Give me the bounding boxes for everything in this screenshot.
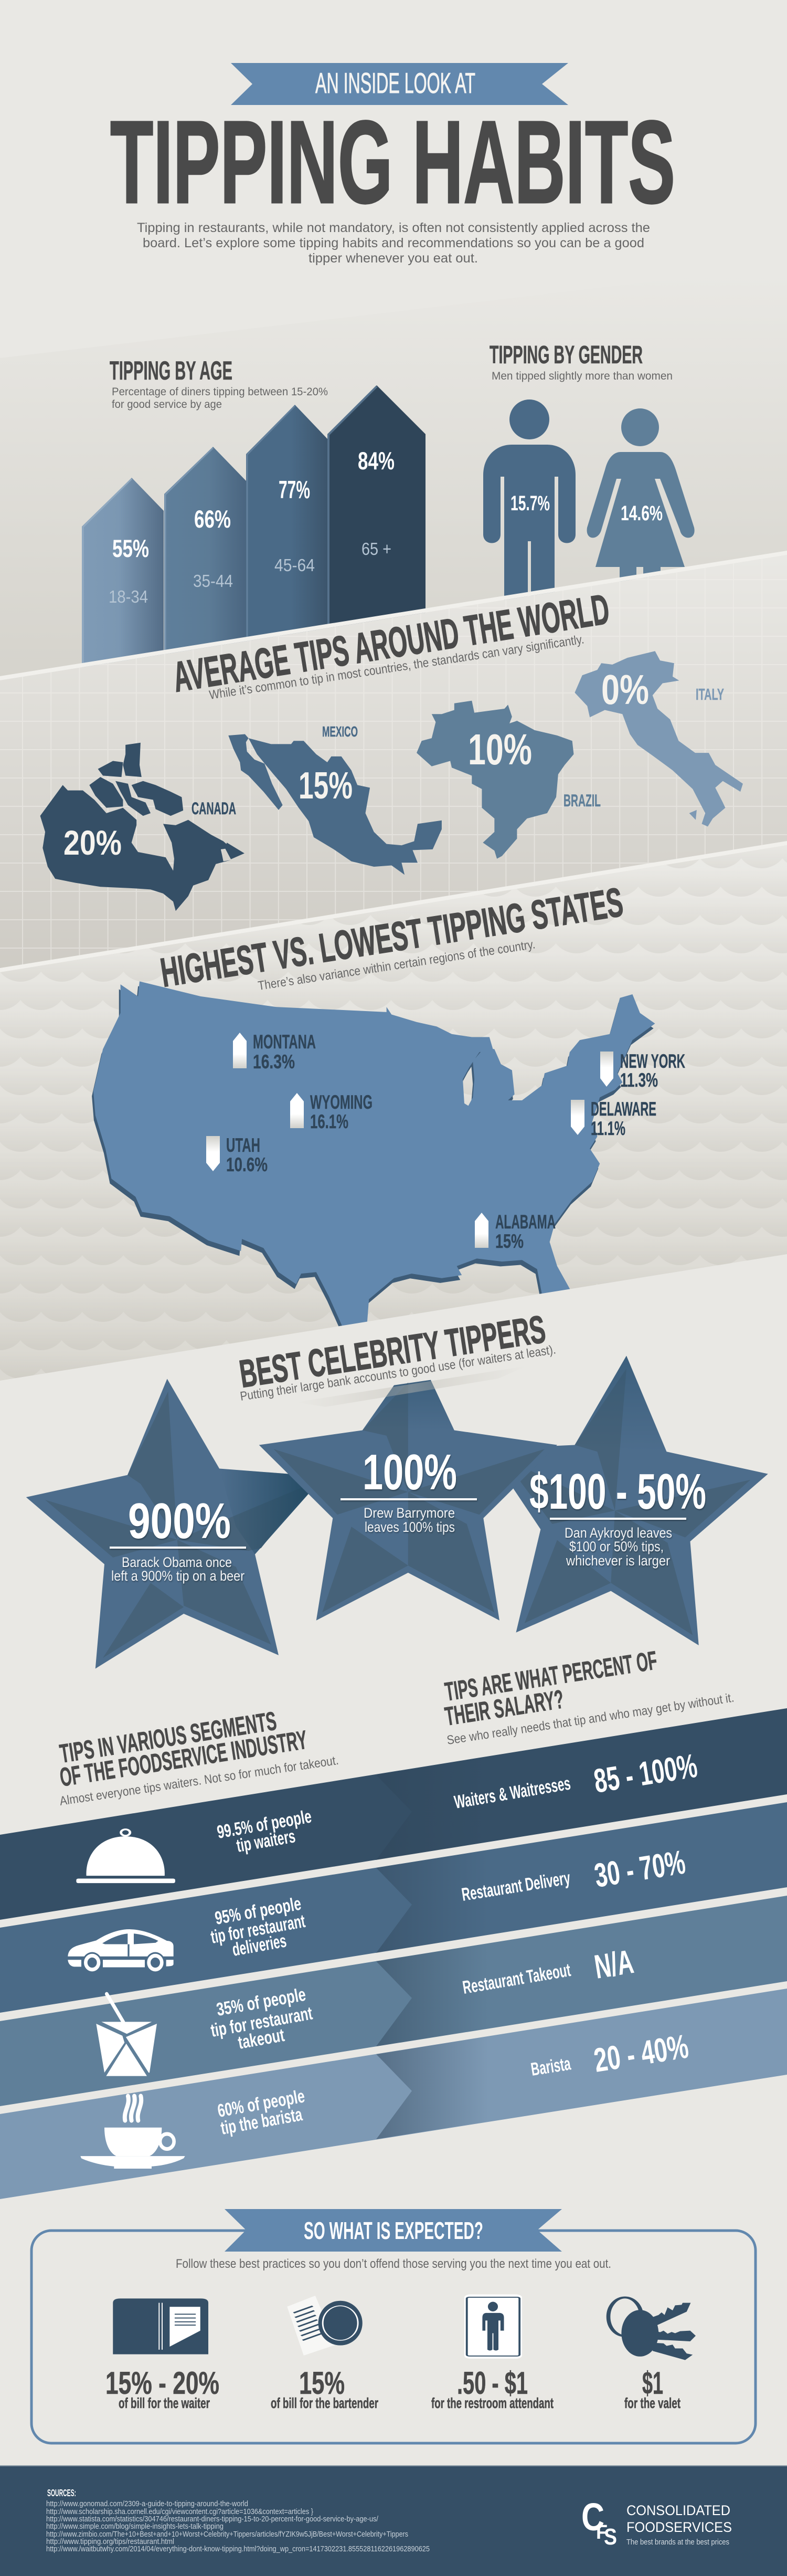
- chart: tipping by age arrows: 66%: [194, 505, 231, 533]
- intro paragraph: [137, 220, 650, 266]
- sources list: http://www.zimbio.com/The+10+Best+and+10+Worst+Celebrity+Tippers/articles/fYZIK9w5JjB/Best+Worst+Celebrity+Tippers: [46, 2530, 408, 2539]
- heading: tips in various segments: [58, 1706, 339, 1809]
- icon: receipt and plate: [287, 2296, 363, 2356]
- map: brazil 10%: [417, 701, 601, 859]
- heading: tipping by age: TIPPING BY AGE: [110, 356, 232, 385]
- icon: coffee cup: [80, 2096, 185, 2169]
- band: waiters: [0, 1708, 787, 1920]
- panel: celebrity tippers background: [0, 1254, 787, 2466]
- panel: average tips around the world: [0, 551, 787, 997]
- icon: man 15.7%: [483, 399, 576, 630]
- band: waiters: tip waiters: [235, 1826, 297, 1856]
- logo: consolidated foodservices: F: [596, 2521, 608, 2543]
- header ribbon: an inside look at: [231, 63, 568, 105]
- map: brazil 10%: BRAZIL: [563, 791, 601, 810]
- map: canada 20%: CANADA: [192, 799, 236, 818]
- map: brazil 10%: 10%: [468, 725, 532, 774]
- band: restaurant delivery: tip for restaurant: [209, 1911, 307, 1948]
- panel: demographics background: [0, 266, 787, 693]
- expected: valet: $1: [642, 2365, 663, 2401]
- state marker: new york 11.3%: NEW YORK: [620, 1050, 685, 1072]
- map: italy 0%: ITALY: [696, 685, 724, 703]
- map: united states: [92, 981, 655, 1340]
- band: restaurant takeout: [0, 1896, 787, 2106]
- logo: consolidated foodservices: FOODSERVICES: [626, 2519, 732, 2535]
- state marker: delaware 11.1%: [571, 1098, 656, 1139]
- expected: valet: for the valet: [624, 2395, 680, 2411]
- map: italy 0%: 0%: [601, 666, 649, 713]
- logo: consolidated foodservices: C: [581, 2495, 604, 2539]
- chart: tipping by age arrows: 55%: [112, 534, 149, 562]
- state marker: montana 16.3%: 16.3%: [253, 1051, 295, 1073]
- band: restaurant takeout: tip for restaurant: [209, 2003, 314, 2041]
- ribbon: so what is expected: [225, 2209, 562, 2252]
- heading: tipping by gender: TIPPING BY GENDER: [490, 341, 643, 369]
- heading: tipping by age: for good service by age: [112, 398, 222, 411]
- ribbon: so what is expected: SO WHAT IS EXPECTED?: [304, 2217, 483, 2244]
- text: best practices: Follow these best practices so you don’t offend those serving you the next time you eat out.: [176, 2257, 611, 2271]
- map: mexico 15%: 15%: [299, 765, 353, 807]
- icon: check presenter: [113, 2298, 208, 2354]
- state marker: montana 16.3%: [233, 1031, 316, 1073]
- heading: tipping by age: [110, 356, 328, 411]
- heading: tips in various segments: Almost everyone tips waiters. Not so for much for takeout.: [59, 1753, 339, 1809]
- heading: tipping by gender: Men tipped slightly more than women: [492, 370, 673, 382]
- icon: restroom sign: [464, 2295, 522, 2359]
- state marker: alabama 15%: ALABAMA: [495, 1211, 556, 1233]
- logo: consolidated foodservices: CONSOLIDATED: [626, 2503, 730, 2518]
- icon: cloche: [76, 1830, 175, 1883]
- band: barista: tip the barista: [219, 2104, 304, 2139]
- icon: man 15.7%: 15.7%: [511, 492, 550, 515]
- panel: so what is expected: [31, 2231, 756, 2443]
- logo: consolidated foodservices: [581, 2495, 732, 2550]
- heading: highest vs lowest tipping states: There’s also variance within certain regions of the country.: [257, 937, 536, 993]
- expected: bartender: 15%: [299, 2365, 345, 2401]
- band: barista: [0, 1989, 787, 2199]
- state marker: wyoming 16.1%: WYOMING: [310, 1091, 373, 1113]
- band: barista: Barista: [529, 2053, 572, 2080]
- state marker: wyoming 16.1%: 16.1%: [310, 1111, 348, 1132]
- state marker: utah 10.6%: UTAH: [226, 1134, 260, 1156]
- star: dan aykroyd $100 - 50%: whichever is larger: [566, 1553, 670, 1569]
- band: waiters: 99.5% of people: [216, 1806, 313, 1843]
- star: drew barrymore 100%: Drew Barrymore: [364, 1505, 455, 1521]
- icon: woman 14.6%: 14.6%: [621, 502, 663, 525]
- intro paragraph: Tipping in restaurants, while not mandatory, is often not consistently applied across the: [137, 220, 650, 235]
- band: restaurant takeout: takeout: [237, 2025, 286, 2053]
- expected: valet: [624, 2365, 680, 2411]
- heading: best celebrity tippers: [237, 1307, 557, 1404]
- state marker: wyoming 16.1%: [290, 1091, 373, 1132]
- star: drew barrymore 100%: 100%: [363, 1444, 457, 1500]
- logo: consolidated foodservices: S: [604, 2524, 617, 2550]
- band: barista: 20 - 40%: [591, 2027, 691, 2079]
- panel: highest vs lowest states: [0, 841, 787, 1386]
- heading: best celebrity tippers: BEST CELEBRITY TIPPERS: [237, 1307, 548, 1396]
- map: mexico 15%: [228, 723, 442, 875]
- logo: consolidated foodservices: The best brands at the best prices: [626, 2538, 729, 2547]
- expected: restroom attendant: .50 - $1: [457, 2365, 528, 2401]
- chart: tipping by age arrows: 45-64: [274, 555, 315, 575]
- expected: restroom attendant: [431, 2365, 554, 2411]
- expected: waiter: of bill for the waiter: [119, 2395, 210, 2411]
- band: restaurant delivery: 30 - 70%: [592, 1843, 688, 1895]
- sources list: http://www.tipping.org/tips/restaurant.html: [46, 2538, 174, 2546]
- intro paragraph: tipper whenever you eat out.: [309, 251, 478, 266]
- state marker: montana 16.3%: MONTANA: [253, 1031, 316, 1053]
- state marker: utah 10.6%: [206, 1134, 268, 1175]
- expected: bartender: of bill for the bartender: [271, 2395, 378, 2411]
- expected: restroom attendant: for the restroom attendant: [431, 2395, 554, 2411]
- star: dan aykroyd $100 - 50%: [487, 1356, 768, 1645]
- band: restaurant takeout: 35% of people: [215, 1984, 307, 2020]
- footer bar: [0, 2465, 787, 2576]
- star: dan aykroyd $100 - 50%: $100 or 50% tips,: [569, 1539, 664, 1554]
- map: canada 20%: 20%: [63, 823, 122, 862]
- heading: tips are what percent of their salary: [443, 1645, 735, 1748]
- chart: tipping by age arrows: 65 +: [361, 539, 391, 559]
- star: dan aykroyd $100 - 50%: $100 - 50%: [529, 1464, 706, 1520]
- band: barista: 60% of people: [216, 2086, 306, 2121]
- star: barack obama 900%: Barack Obama once: [122, 1554, 232, 1570]
- chart: tipping by age arrows: 84%: [358, 447, 395, 475]
- sources list: SOURCES:: [47, 2488, 76, 2498]
- heading: tipping by gender: [490, 341, 673, 382]
- heading shadow strip: [296, 1366, 527, 1407]
- star: drew barrymore 100%: leaves 100% tips: [365, 1519, 455, 1535]
- state marker: delaware 11.1%: 11.1%: [591, 1118, 625, 1139]
- icon: woman 14.6%: [587, 408, 695, 630]
- state marker: delaware 11.1%: DELAWARE: [591, 1098, 656, 1120]
- icon: takeout box: [96, 1994, 157, 2076]
- heading: highest vs lowest tipping states: [157, 879, 626, 996]
- sources list: http://www.simple.com/blog/simple-insights-lets-talk-tipping: [46, 2522, 224, 2531]
- heading: tips in various segments: OF THE FOODSERVICE INDUSTRY: [58, 1725, 309, 1792]
- band: restaurant delivery: 95% of people: [214, 1894, 303, 1929]
- sources list: http://www.scholarship.sha.cornell.edu/cgi/viewcontent.cgi?article=1036&context=articles }: [46, 2508, 313, 2516]
- chart: tipping by age arrows: 18-34: [109, 587, 148, 606]
- map: canada 20%: [40, 743, 244, 911]
- star: barack obama 900%: [26, 1379, 324, 1669]
- heading: tipping by age: Percentage of diners tipping between 15-20%: [112, 386, 328, 398]
- band: waiters: 85 - 100%: [591, 1747, 700, 1800]
- state marker: alabama 15%: 15%: [495, 1231, 524, 1252]
- star: drew barrymore 100%: [259, 1380, 557, 1621]
- band: waiters: Waiters & Waitresses: [453, 1773, 572, 1813]
- state marker: utah 10.6%: 10.6%: [226, 1154, 268, 1175]
- band: restaurant delivery: Restaurant Delivery: [460, 1868, 572, 1905]
- intro paragraph: board. Let’s explore some tipping habits and recommendations so you can be a good: [143, 236, 644, 250]
- map: italy 0%: [575, 651, 743, 826]
- heading: average tips around the world: [170, 585, 612, 702]
- header ribbon: an inside look at: AN INSIDE LOOK AT: [315, 67, 475, 99]
- sources list: http://www./waitbutwhy.com/2014/04/everything-dont-know-tipping.html?doing_wp_cron=1417302231.8555281162261962890625: [46, 2545, 430, 2553]
- state marker: new york 11.3%: 11.3%: [620, 1069, 658, 1091]
- heading: tips are what percent of their salary: THEIR SALARY?: [443, 1684, 566, 1731]
- sources list: [46, 2488, 430, 2553]
- sources list: http://www.statista.com/statistics/304746/restaurant-diners-tipping-15-to-20-percent-for-good-service-by-age-us/: [46, 2515, 379, 2524]
- heading: tips are what percent of their salary: See who really needs that tip and who may get by without it.: [446, 1690, 735, 1748]
- star: dan aykroyd $100 - 50%: Dan Aykroyd leaves: [565, 1525, 672, 1541]
- heading: best celebrity tippers: Putting their large bank accounts to good use (for waiters at least).: [239, 1342, 557, 1404]
- expected: waiter: [105, 2365, 219, 2411]
- band: restaurant takeout: N/A: [592, 1942, 636, 1986]
- band: restaurant takeout: Restaurant Takeout: [461, 1960, 572, 1998]
- chart: tipping by age arrows: 35-44: [193, 571, 233, 591]
- chart: tipping by age arrows: 77%: [279, 476, 310, 503]
- heading: average tips around the world: While it’s common to tip in most countries, the standards can vary significantly.: [208, 633, 585, 702]
- expected: waiter: 15% - 20%: [105, 2365, 219, 2401]
- band: restaurant delivery: deliveries: [231, 1930, 288, 1960]
- expected: bartender: [271, 2365, 378, 2411]
- heading: tips in various segments: TIPS IN VARIOUS SEGMENTS: [58, 1706, 279, 1769]
- chart: tipping by age arrows: [82, 385, 426, 693]
- sources list: http://www.gonomad.com/2309-a-guide-to-tipping-around-the-world: [46, 2500, 248, 2508]
- icon: keys: [609, 2297, 696, 2360]
- band: restaurant delivery: [0, 1802, 787, 2013]
- state marker: new york 11.3%: [600, 1050, 685, 1091]
- star: barack obama 900%: left a 900% tip on a beer: [111, 1568, 244, 1584]
- icon: car: [68, 1929, 174, 1973]
- state marker: alabama 15%: [475, 1211, 556, 1252]
- map: mexico 15%: MEXICO: [322, 723, 358, 740]
- star: barack obama 900%: 900%: [128, 1493, 231, 1549]
